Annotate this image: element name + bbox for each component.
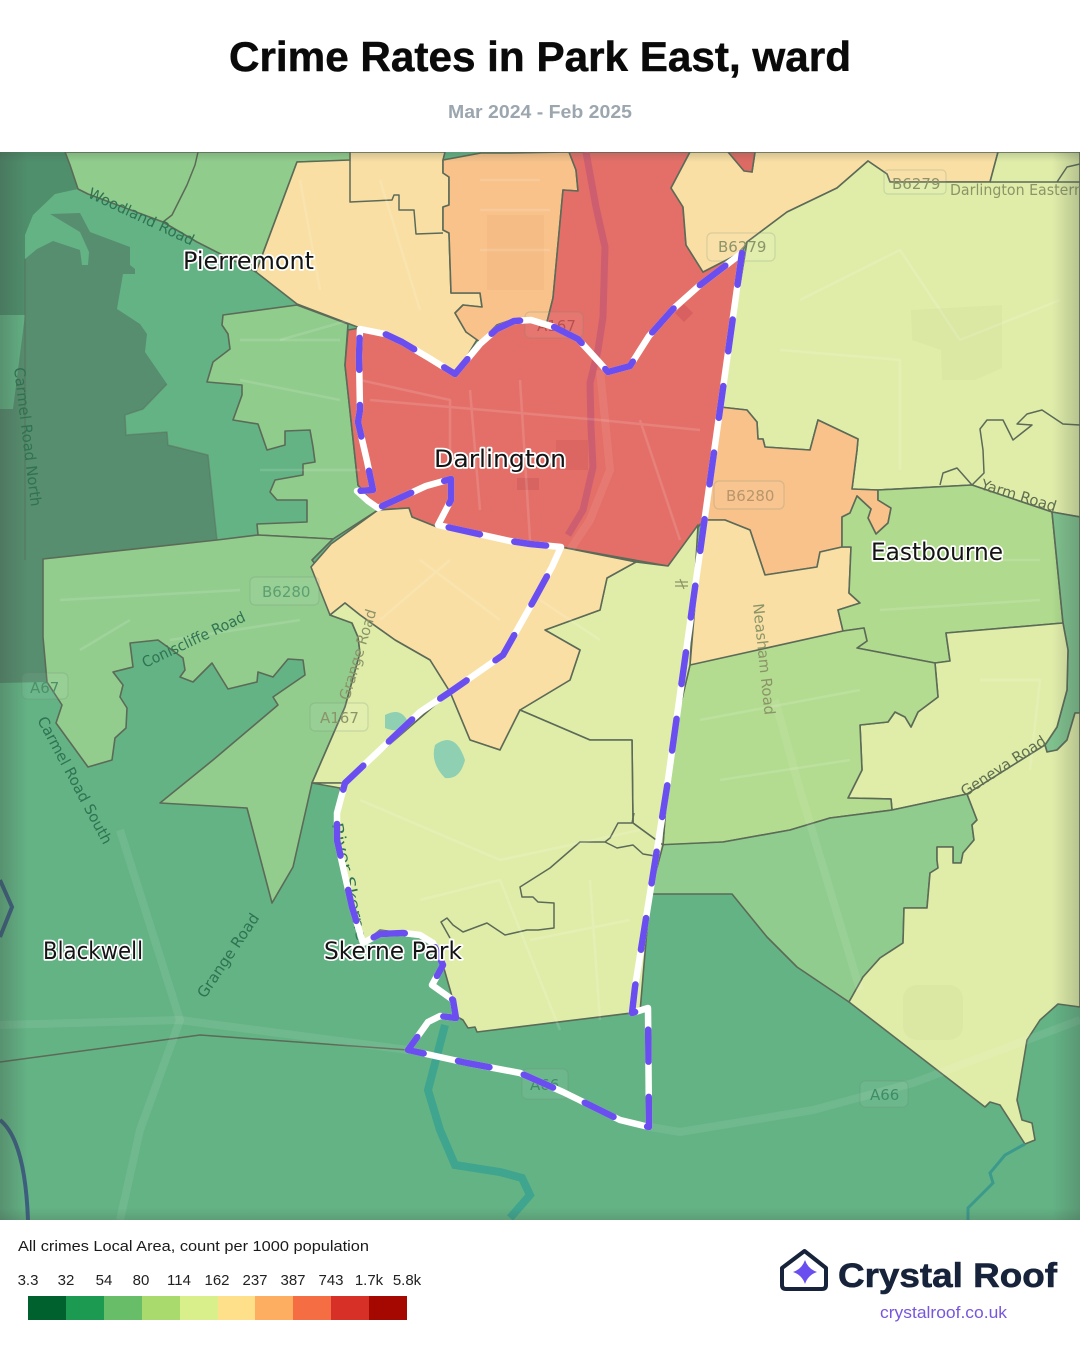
road labels: A167	[320, 709, 359, 727]
legend value labels: 80	[133, 1272, 149, 1289]
road labels: Carmel Road North	[10, 366, 45, 507]
choropleth map	[0, 152, 1080, 1220]
road labels: B6279	[718, 238, 766, 256]
place labels: Eastbourne	[871, 538, 1003, 566]
river skerne	[0, 152, 1025, 1220]
road labels: A66	[870, 1086, 899, 1104]
road labels: A67	[30, 679, 59, 697]
road labels	[10, 170, 1080, 1107]
legend title: All crimes Local Area, count per 1000 population	[18, 1238, 369, 1255]
legend value labels	[18, 1272, 422, 1289]
road labels: Woodland Road	[85, 184, 197, 249]
legend value labels: 162	[204, 1272, 230, 1289]
legend colour scale	[28, 1296, 407, 1320]
road labels: B6280	[726, 487, 774, 505]
logo: Crystal Roof	[782, 1251, 1058, 1322]
place labels: Darlington	[434, 445, 566, 473]
road labels: River Skerne	[328, 821, 371, 942]
title: Crime Rates in Park East, ward	[229, 33, 851, 80]
road labels: Grange Road	[193, 910, 263, 1001]
road labels: Geneva Road	[957, 732, 1049, 800]
road labels: Neasham Road	[749, 603, 779, 716]
legend value labels: 743	[318, 1272, 344, 1289]
place labels: Pierremont	[183, 247, 314, 275]
road labels: A66	[530, 1076, 559, 1094]
place labels: Blackwell	[43, 937, 143, 965]
road labels: A167	[537, 317, 576, 335]
legend value labels: 32	[58, 1272, 74, 1289]
legend value labels: 387	[280, 1272, 306, 1289]
legend	[18, 1238, 422, 1320]
icon: railway station	[675, 579, 688, 589]
legend value labels: 114	[167, 1272, 191, 1289]
road labels: B6280	[262, 583, 310, 601]
road labels: Grange Road	[336, 607, 380, 702]
legend value labels: 237	[242, 1272, 268, 1289]
road labels: Carmel Road South	[33, 713, 116, 847]
ward boundary: Park East	[337, 253, 742, 1127]
street network	[0, 180, 1080, 1220]
road labels: B6279	[892, 175, 940, 193]
road labels: Coniscliffe Road	[139, 608, 248, 672]
subtitle: date range: Mar 2024 - Feb 2025	[448, 102, 632, 122]
legend value labels: 1.7k	[355, 1272, 384, 1289]
logo url: crystalroof.co.uk	[880, 1303, 1008, 1322]
logo wordmark: Crystal Roof	[838, 1257, 1058, 1295]
icon: house with sparkle	[782, 1251, 826, 1289]
legend value labels: 3.3	[18, 1272, 38, 1289]
place labels: Skerne Park	[324, 937, 462, 965]
legend value labels: 54	[96, 1272, 112, 1289]
place labels	[43, 247, 1003, 965]
legend value labels: 5.8k	[393, 1272, 422, 1289]
road labels: Yarm Road	[978, 475, 1059, 516]
